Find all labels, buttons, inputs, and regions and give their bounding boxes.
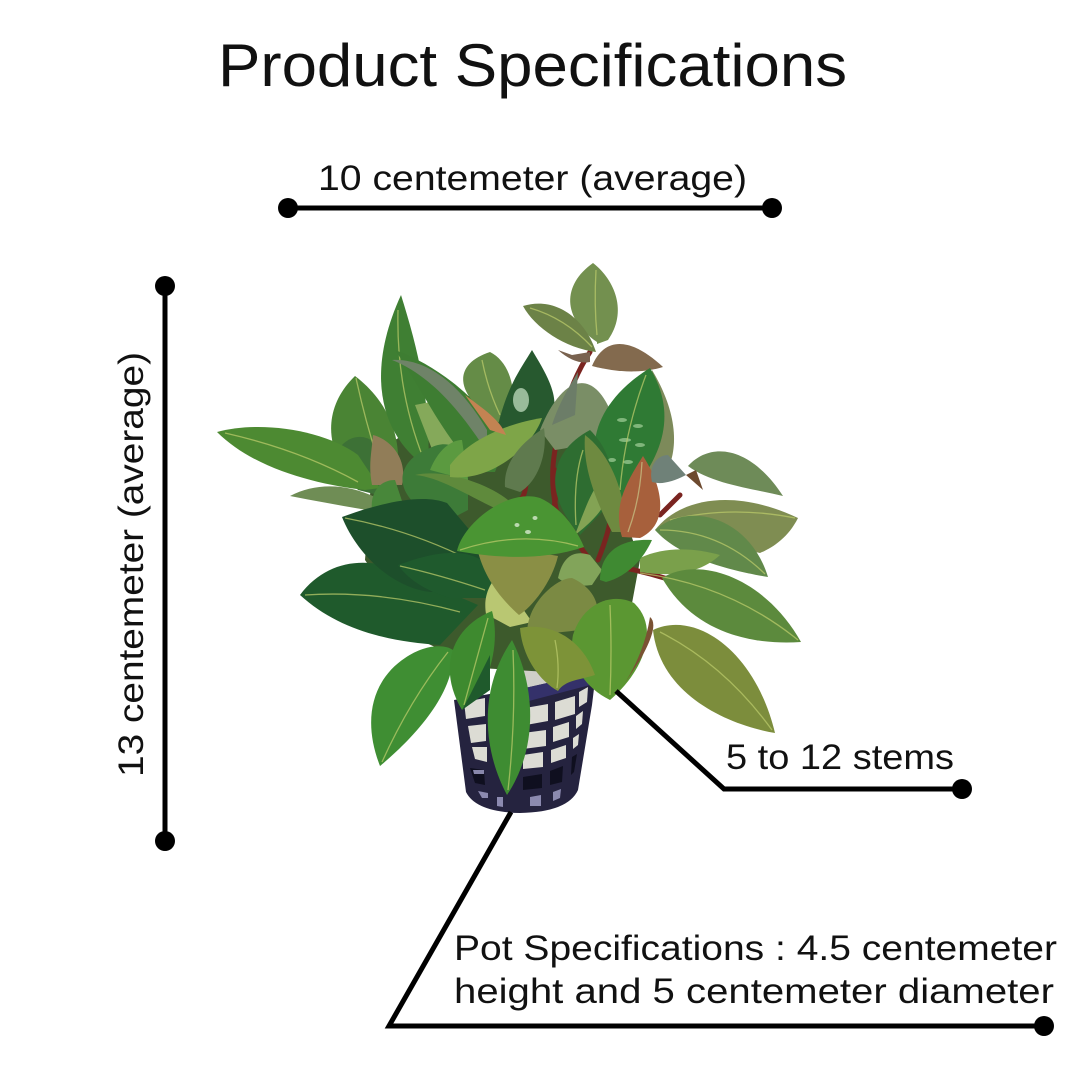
width dimension: 10 centemeter <box>278 159 782 218</box>
height dimension: 13 centemeter <box>112 276 175 851</box>
back foliage <box>331 263 674 538</box>
stems <box>520 352 700 590</box>
dark foliage backing <box>365 395 640 675</box>
left foliage <box>217 395 545 645</box>
callout: 5 to 12 stems <box>616 691 972 799</box>
callout: pot specifications: Pot Specifications : 4.5 centemeter <box>454 929 1057 968</box>
pot <box>454 650 596 813</box>
callout: 5 to 12 stems: 5 to 12 stems <box>726 738 954 777</box>
lower foliage <box>371 611 595 795</box>
title: Product Specifications <box>218 32 847 99</box>
right foliage <box>600 451 801 733</box>
height dimension: 13 centemeter: 13 centemeter (average) <box>112 352 151 777</box>
centre foliage <box>457 496 653 700</box>
big right leaf <box>648 370 674 482</box>
top right leaves <box>570 263 618 344</box>
callout: pot specifications: height and 5 centemeter diameter <box>454 972 1054 1011</box>
plant photo illustration <box>217 263 801 813</box>
callout: pot specifications <box>389 812 1057 1036</box>
width dimension: 10 centemeter: 10 centemeter (average) <box>318 159 747 198</box>
